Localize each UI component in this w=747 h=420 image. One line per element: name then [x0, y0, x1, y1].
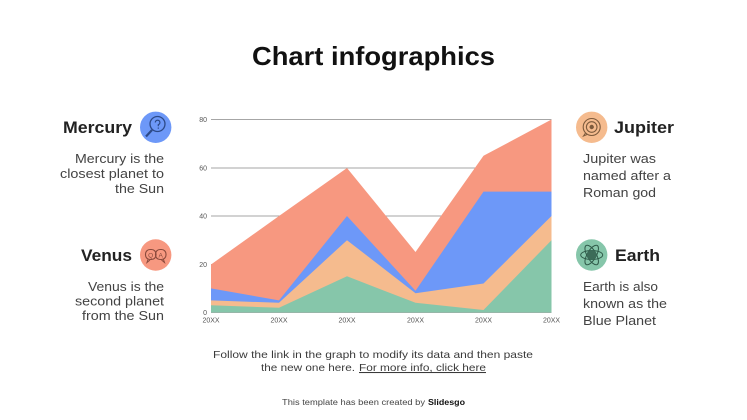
x axis labels: 20XX [475, 318, 492, 324]
text: template credit: This template has been created by [282, 398, 425, 407]
icon: magnifier with question mark [140, 112, 171, 143]
y axis labels: 60 [199, 166, 207, 172]
heading: jupiter: Jupiter [614, 118, 674, 137]
text: earth description [583, 280, 667, 328]
text: mercury description: Mercury is the [75, 152, 164, 166]
panel: earth [576, 239, 667, 328]
heading: earth: Earth [615, 246, 660, 265]
text: mercury description: the Sun [115, 182, 164, 196]
text: jupiter description: Jupiter was [583, 152, 656, 166]
text: jupiter description: named after a [583, 169, 671, 183]
text: chart note [213, 349, 533, 374]
y axis labels: 40 [199, 214, 207, 220]
text: venus description [75, 280, 165, 323]
icon: question and answer bubbles: Q [148, 252, 153, 259]
icon: atom with globe [576, 239, 607, 271]
panel: jupiter [576, 112, 674, 200]
text: chart note: Follow the link in the graph to modify its data and then paste [213, 349, 533, 361]
icon: question and answer bubbles [140, 239, 171, 271]
title: Chart infographics [252, 41, 495, 71]
text: jupiter description: Roman god [583, 186, 656, 200]
text: template credit [282, 398, 465, 407]
area: peach series [211, 216, 552, 312]
y axis labels: 80 [199, 117, 207, 124]
y axis labels: 20 [199, 262, 207, 269]
area: red series [211, 120, 552, 312]
area: green series [211, 240, 552, 312]
area chart [199, 117, 560, 324]
text: mercury description [60, 152, 164, 196]
icon: question and answer bubbles: A [159, 252, 164, 259]
text: jupiter description [583, 152, 671, 200]
text: earth description: Earth is also [583, 280, 658, 294]
x axis labels: 20XX [202, 318, 220, 324]
x axis labels: 20XX [407, 318, 424, 324]
text: chart note: the new one here. [261, 362, 355, 374]
text: template credit: Slidesgo [428, 398, 465, 407]
panel: venus [75, 239, 171, 323]
text: venus description: from the Sun [82, 309, 164, 323]
text: earth description: Blue Planet [583, 314, 657, 328]
icon: spiral speech bubble [576, 112, 607, 143]
x axis labels: 20XX [270, 318, 288, 324]
heading: venus: Venus [81, 246, 132, 265]
text: earth description: known as the [583, 297, 667, 311]
heading: mercury: Mercury [63, 118, 133, 137]
y axis labels: 0 [203, 310, 207, 317]
x axis labels: 20XX [543, 318, 560, 324]
y axis labels [199, 117, 207, 317]
x axis labels [202, 318, 560, 324]
x axis labels: 20XX [338, 318, 356, 324]
text: mercury description: closest planet to [60, 167, 164, 181]
panel: mercury [60, 112, 171, 196]
text: venus description: Venus is the [88, 280, 164, 294]
area: blue series [211, 192, 552, 312]
text: venus description: second planet [75, 294, 165, 308]
text: chart note: For more info, click here [359, 362, 486, 374]
